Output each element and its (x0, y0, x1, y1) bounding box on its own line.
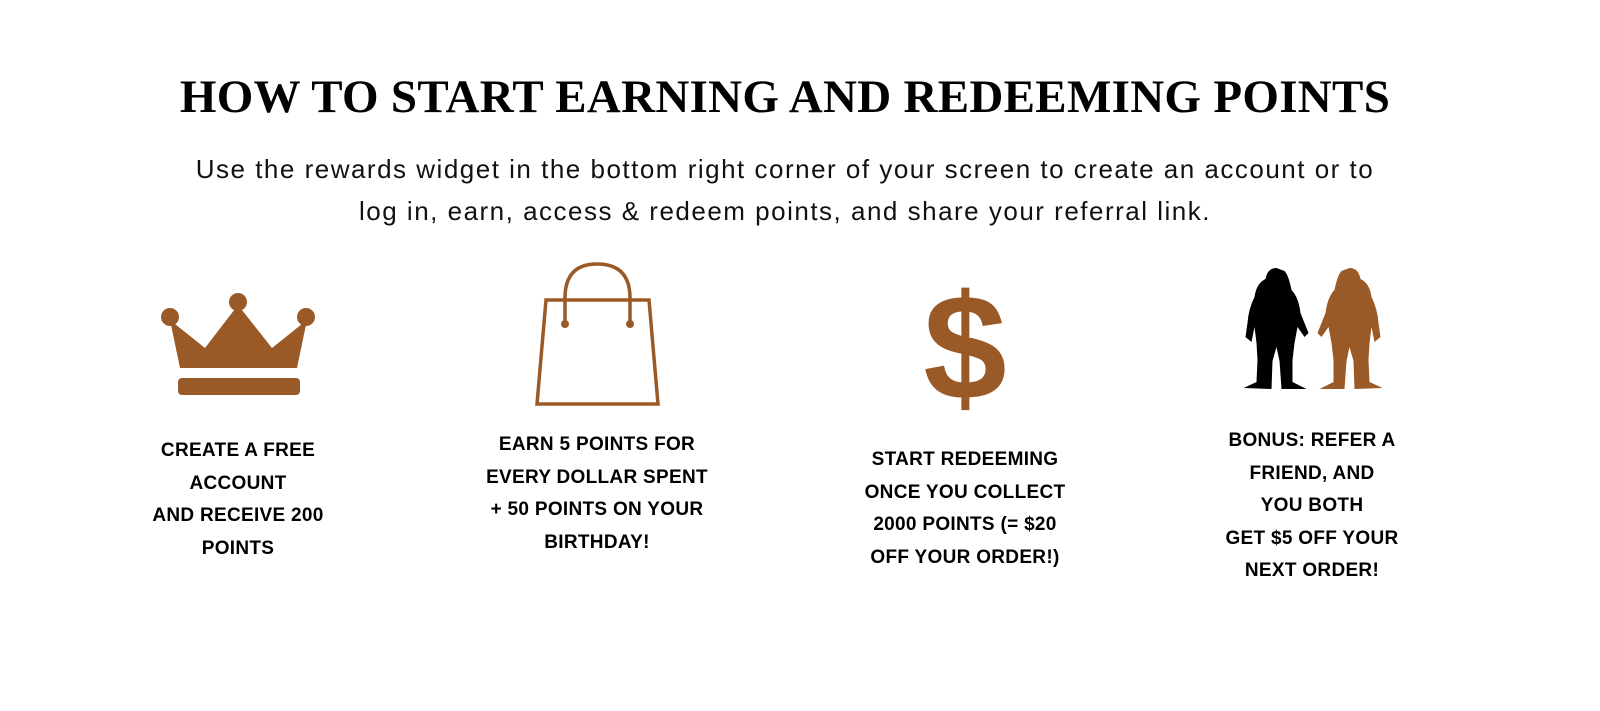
caption: earn points: BIRTHDAY! (544, 532, 650, 552)
caption: create account: AND RECEIVE 200 (152, 505, 324, 526)
caption: earn points: EARN 5 POINTS FOR (499, 434, 695, 455)
caption: bonus referral: GET $5 OFF YOUR (1225, 528, 1399, 548)
caption: earn points (486, 434, 708, 552)
caption: bonus referral: YOU BOTH (1261, 495, 1363, 516)
title: HOW TO START EARNING AND REDEEMING POINTS (180, 71, 1390, 123)
caption: start redeeming: 2000 POINTS (= $20 (873, 514, 1057, 535)
icon: dollar sign: $ (923, 263, 1007, 431)
subtitle (196, 154, 1374, 226)
caption: start redeeming: ONCE YOU COLLECT (865, 482, 1065, 502)
caption: create account: CREATE A FREE (161, 440, 315, 461)
caption: bonus referral: BONUS: REFER A (1228, 430, 1396, 451)
caption: create account (152, 440, 324, 558)
caption: start redeeming: OFF YOUR ORDER!) (870, 546, 1060, 568)
caption: earn points: EVERY DOLLAR SPENT (486, 466, 708, 488)
caption: create account: POINTS (202, 538, 274, 558)
caption: start redeeming (865, 449, 1065, 568)
caption: start redeeming: START REDEEMING (872, 449, 1058, 470)
caption: earn points: + 50 POINTS ON YOUR (491, 499, 703, 520)
icon: crown (161, 293, 315, 395)
caption: bonus referral: FRIEND, AND (1249, 462, 1375, 484)
caption: bonus referral: NEXT ORDER! (1245, 560, 1379, 581)
subtitle: Use the rewards widget in the bottom right corner of your screen to create an account or to (196, 154, 1374, 184)
caption: create account: ACCOUNT (189, 472, 287, 494)
icon: two bigfoot silhouettes (1244, 268, 1382, 389)
icon: shopping bag (535, 262, 660, 406)
caption: bonus referral (1225, 430, 1399, 581)
subtitle: log in, earn, access & redeem points, and share your referral link. (359, 196, 1211, 226)
